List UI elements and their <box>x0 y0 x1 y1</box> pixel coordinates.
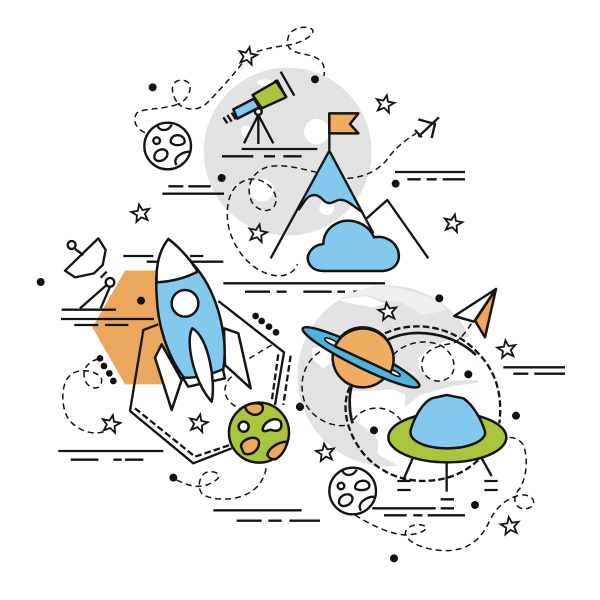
rocket nozzle <box>183 368 225 387</box>
ufo <box>388 395 506 508</box>
panel: rocket scene <box>37 238 412 521</box>
line groups <box>162 172 465 194</box>
rocket window <box>172 290 198 317</box>
dots <box>296 294 520 562</box>
saturn ring slot right <box>387 368 401 378</box>
panel: telescope and mountain scene <box>130 27 465 276</box>
rocket <box>155 239 251 410</box>
saturn globe <box>333 327 393 387</box>
outline planet <box>329 468 376 514</box>
green planet <box>229 403 289 463</box>
dashed flight path top <box>135 27 324 133</box>
line groups <box>58 256 412 521</box>
ufo legs <box>397 458 498 508</box>
ufo saucer <box>388 412 506 462</box>
dots <box>149 75 400 188</box>
stars <box>130 45 464 243</box>
hexagon outline and inner dashes <box>130 301 291 463</box>
cloud <box>308 221 399 271</box>
rocket right fin <box>224 328 251 388</box>
orbit rings <box>346 326 500 481</box>
dashed orbit paths <box>302 323 534 551</box>
outline planet <box>144 123 191 169</box>
rocket body <box>156 239 225 378</box>
dashed paths <box>63 359 267 499</box>
rocket left fin <box>155 344 182 410</box>
stars <box>101 413 209 433</box>
rocket nose <box>157 239 198 282</box>
moon backdrop <box>204 68 372 236</box>
globe backdrop <box>298 286 478 466</box>
icon: satellite dish <box>65 238 114 308</box>
dotted beads <box>97 313 279 384</box>
rocket centre fin <box>190 328 213 402</box>
saturn ring <box>298 320 424 395</box>
icon: telescope <box>223 72 294 144</box>
dashed mountain path <box>227 133 416 276</box>
stars <box>315 302 520 535</box>
ufo dome <box>410 395 485 448</box>
saturn ring slot left <box>324 337 340 347</box>
panel: saturn and ufo scene <box>296 285 565 562</box>
paper plane <box>454 289 496 337</box>
saturn upper cap <box>335 329 394 372</box>
saturn <box>298 320 424 395</box>
line groups <box>372 367 565 515</box>
mountains <box>271 151 428 258</box>
flag <box>329 113 358 150</box>
dots <box>37 278 304 482</box>
icon: airplane <box>415 117 439 138</box>
telescope ground lines <box>222 149 317 156</box>
orange hexagon <box>92 271 193 384</box>
